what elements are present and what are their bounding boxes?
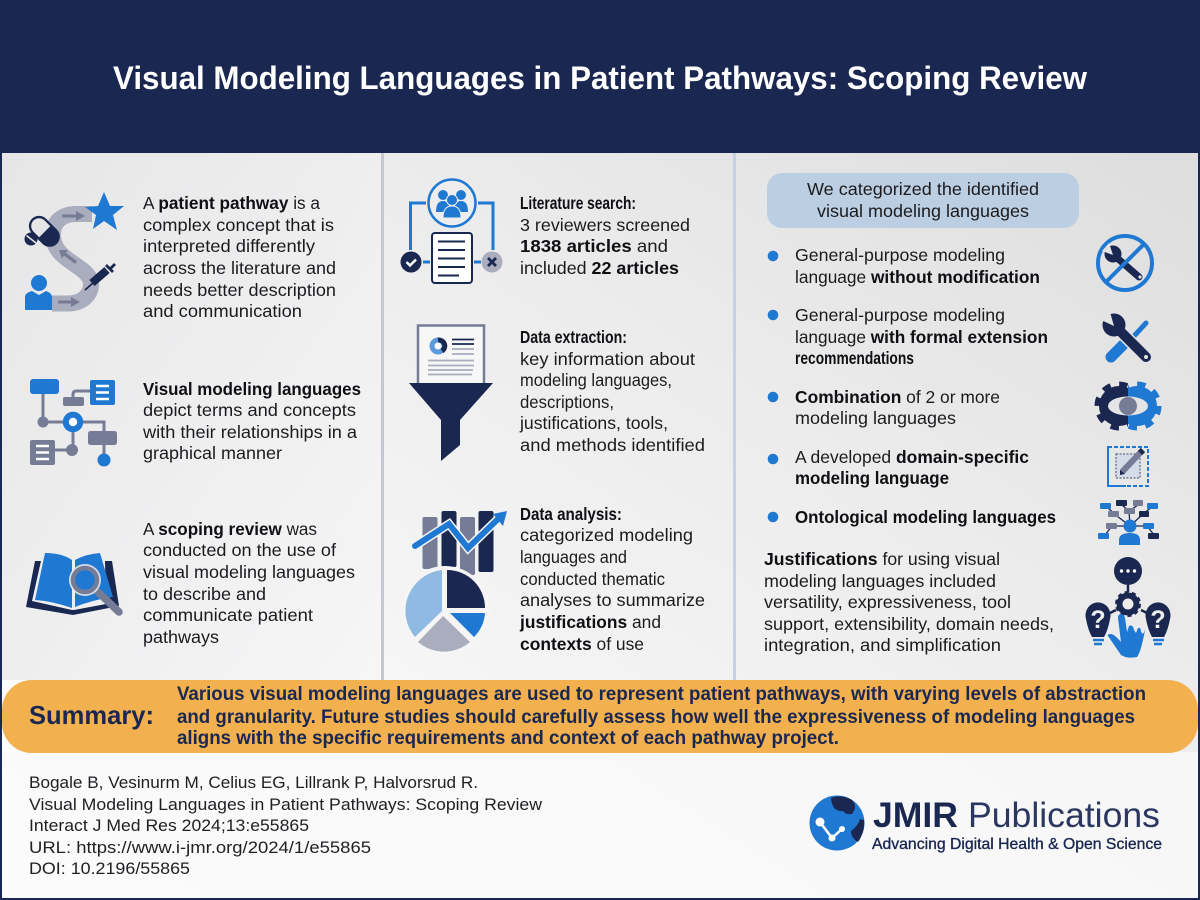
text: patient pathway: interpreted differently: [143, 236, 315, 256]
heading: categories: We categorized the identified: [807, 179, 1039, 199]
icon: crossed-out wrench: [1098, 236, 1152, 290]
logo wordmark: JMIR: [873, 796, 958, 835]
text: literature search: included 22 articles: [520, 258, 679, 278]
list item: without modification: General-purpose modeling: [795, 245, 1005, 265]
text: justifications: [764, 549, 1054, 655]
list item: domain-specific: A developed domain-specific: [795, 447, 1029, 467]
text: data extraction: justifications, tools,: [519, 413, 668, 433]
column divider left: [381, 153, 384, 680]
logo tagline: Advancing Digital Health & Open Science: [872, 836, 1162, 853]
citation: [29, 773, 543, 878]
summary text: aligns with the specific requirements and context of each pathway project.: [177, 727, 839, 749]
text: justifications: modeling languages included: [764, 571, 996, 591]
text: data extraction: key information about: [520, 349, 695, 369]
text: patient pathway: complex concept that is: [143, 215, 334, 235]
citation: URL: https://www.i-jmr.org/2024/1/e55865: [29, 838, 371, 857]
text: scoping review: [143, 519, 355, 647]
text: data analysis: justifications and: [519, 612, 661, 632]
text: patient pathway: [143, 193, 336, 321]
icon: globe: [810, 796, 864, 850]
citation: Visual Modeling Languages in Patient Pathways: Scoping Review: [29, 795, 543, 814]
text: visual modeling languages: graphical manner: [143, 443, 282, 463]
summary text: Various visual modeling languages are used to represent patient pathways, with varying levels of abstraction: [177, 683, 1146, 705]
list item: combination: modeling languages: [795, 408, 956, 428]
icon: book and magnifier: [26, 553, 119, 615]
text: patient pathway: across the literature and: [143, 258, 336, 278]
text: justifications: versatility, expressiveness, tool: [764, 592, 1011, 612]
text: data analysis: conducted thematic: [520, 569, 665, 589]
text: data analysis: analyses to summarize: [520, 590, 705, 610]
icon: person with network: [1098, 500, 1159, 545]
panel: summary band: [2, 680, 1198, 753]
icon: pencil in dashed square: [1108, 446, 1148, 486]
logo: JMIR Publications: [810, 796, 1162, 853]
text: literature search: [520, 193, 690, 278]
icon: justification gear, bulbs and hand: ?: [1090, 606, 1106, 634]
text: data analysis: contexts of use: [520, 634, 644, 654]
icon: literature search: [400, 180, 502, 283]
citation: DOI: 10.2196/55865: [29, 859, 190, 878]
text: visual modeling languages: depict terms and concepts: [143, 400, 356, 420]
list item: without modification: [768, 245, 1040, 287]
text: scoping review: visual modeling languages: [143, 562, 355, 582]
text: data extraction: and methods identified: [520, 435, 705, 455]
icon: combined gears: [1097, 384, 1159, 428]
text: literature search: 1838 articles and: [520, 236, 668, 256]
icon: data funnel: [409, 326, 493, 461]
text: justifications: Justifications for using visual: [764, 549, 1000, 569]
column divider right: [733, 153, 736, 680]
icon: data analysis charts: [400, 511, 507, 656]
list item: without modification: language without modification: [795, 267, 1040, 287]
list item: domain-specific: modeling language: [795, 468, 949, 488]
icon: modeling diagram: [30, 379, 117, 466]
list item: domain-specific: [768, 447, 1029, 488]
text: data extraction: descriptions,: [520, 392, 614, 412]
text: visual modeling languages: with their relationships in a: [142, 422, 357, 442]
list item: formal extension: [768, 305, 1048, 368]
header banner: [0, 0, 1200, 153]
summary text: and granularity. Future studies should carefully assess how well the expressiveness of modeling languages: [177, 706, 1135, 728]
icon: justification gear, bulbs and hand: [1086, 557, 1171, 658]
text: justifications: support, extensibility, domain needs,: [764, 614, 1054, 634]
text: scoping review: A scoping review was: [143, 519, 317, 539]
panel: categories column: [764, 173, 1171, 658]
list item: formal extension: General-purpose modeling: [795, 305, 1005, 325]
text: data analysis: Data analysis:: [520, 504, 622, 524]
citation: Bogale B, Vesinurm M, Celius EG, Lillrank P, Halvorsrud R.: [29, 773, 478, 792]
logo wordmark light: Publications: [968, 796, 1160, 835]
text: data extraction: Data extraction:: [520, 327, 627, 347]
panel: introduction column: [24, 192, 361, 647]
text: data analysis: languages and: [520, 547, 627, 567]
heading: categories: [767, 173, 1079, 228]
text: patient pathway: needs better description: [143, 280, 336, 300]
list item: formal extension: recommendations: [795, 348, 914, 368]
summary text: [177, 683, 1146, 749]
text: data extraction: [519, 327, 705, 455]
text: scoping review: to describe and: [143, 584, 266, 604]
list item: combination: Combination of 2 or more: [795, 387, 1000, 407]
text: data analysis: [519, 504, 705, 654]
text: data extraction: modeling languages,: [520, 370, 672, 390]
text: visual modeling languages: [142, 379, 361, 463]
text: visual modeling languages: Visual modeling languages: [143, 379, 361, 399]
text: scoping review: communicate patient: [143, 605, 313, 625]
icon: wrench and screwdriver: [1101, 312, 1148, 359]
heading: categories: visual modeling languages: [817, 201, 1029, 221]
list item: combination: [768, 387, 1000, 428]
citation: Interact J Med Res 2024;13:e55865: [29, 816, 309, 835]
text: justifications: integration, and simplification: [764, 635, 1001, 655]
list item: formal extension: language with formal extension: [795, 327, 1048, 347]
list item: ontological: Ontological modeling languages: [795, 507, 1056, 527]
text: literature search: 3 reviewers screened: [520, 215, 690, 235]
panel: methods column: [400, 180, 705, 656]
text: patient pathway: A patient pathway is a: [143, 193, 320, 213]
text: scoping review: conducted on the use of: [143, 540, 336, 560]
icon: justification gear, bulbs and hand: ?: [1150, 606, 1166, 634]
text: data analysis: categorized modeling: [520, 525, 693, 545]
title: Visual Modeling Languages in Patient Pathways: Scoping Review: [113, 60, 1087, 96]
text: scoping review: pathways: [143, 627, 219, 647]
summary label: Summary:: [29, 700, 154, 730]
icon: patient pathway: [24, 192, 124, 310]
text: patient pathway: and communication: [143, 301, 302, 321]
text: literature search: Literature search:: [520, 193, 636, 213]
